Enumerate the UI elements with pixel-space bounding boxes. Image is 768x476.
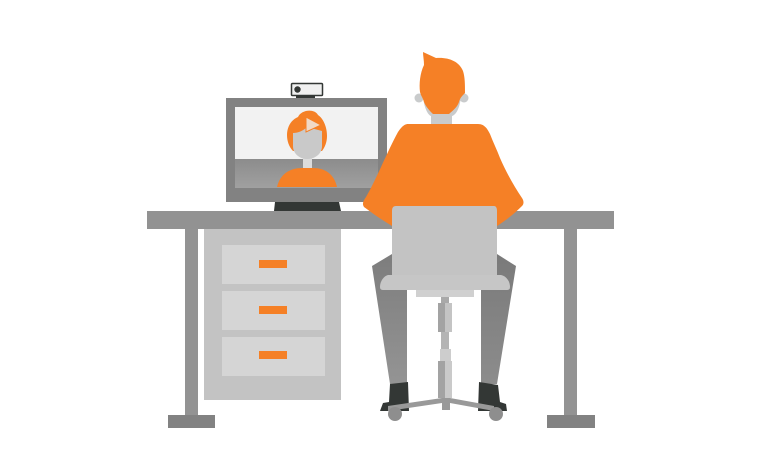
webcam xyxy=(292,84,322,98)
remote person hair highlight xyxy=(306,117,321,132)
desk xyxy=(147,211,614,428)
monitor frame xyxy=(226,98,387,202)
cabinet body xyxy=(204,229,341,400)
ears xyxy=(414,94,468,102)
middle drawer xyxy=(222,291,325,330)
right caster xyxy=(489,407,503,421)
remote person hair xyxy=(287,111,327,151)
bottom drawer xyxy=(222,337,325,376)
remote person shoulders xyxy=(277,168,337,187)
right shoe xyxy=(478,382,507,411)
neck xyxy=(423,96,461,125)
right leg xyxy=(481,254,516,384)
chair seat xyxy=(380,275,510,290)
torso and arms xyxy=(363,124,524,226)
desk left leg xyxy=(168,229,215,428)
top drawer xyxy=(222,245,325,284)
desk right leg xyxy=(547,229,595,428)
remote person on screen xyxy=(277,111,337,187)
chair base xyxy=(388,398,494,411)
desk top xyxy=(147,211,614,229)
chair back xyxy=(392,206,497,276)
left shoe xyxy=(380,382,409,411)
left leg xyxy=(372,254,407,384)
chair column xyxy=(438,297,452,398)
monitor xyxy=(226,84,387,211)
screen wall xyxy=(235,107,378,159)
hair and head xyxy=(420,52,465,114)
chair xyxy=(380,206,510,421)
seat bracket xyxy=(416,290,474,297)
remote person face xyxy=(293,127,322,159)
monitor stand xyxy=(274,202,341,211)
remote person neck xyxy=(303,156,312,169)
screen floor xyxy=(235,159,378,188)
drawer cabinet xyxy=(204,229,341,400)
seated person seen from behind xyxy=(363,52,524,421)
left caster xyxy=(388,407,402,421)
